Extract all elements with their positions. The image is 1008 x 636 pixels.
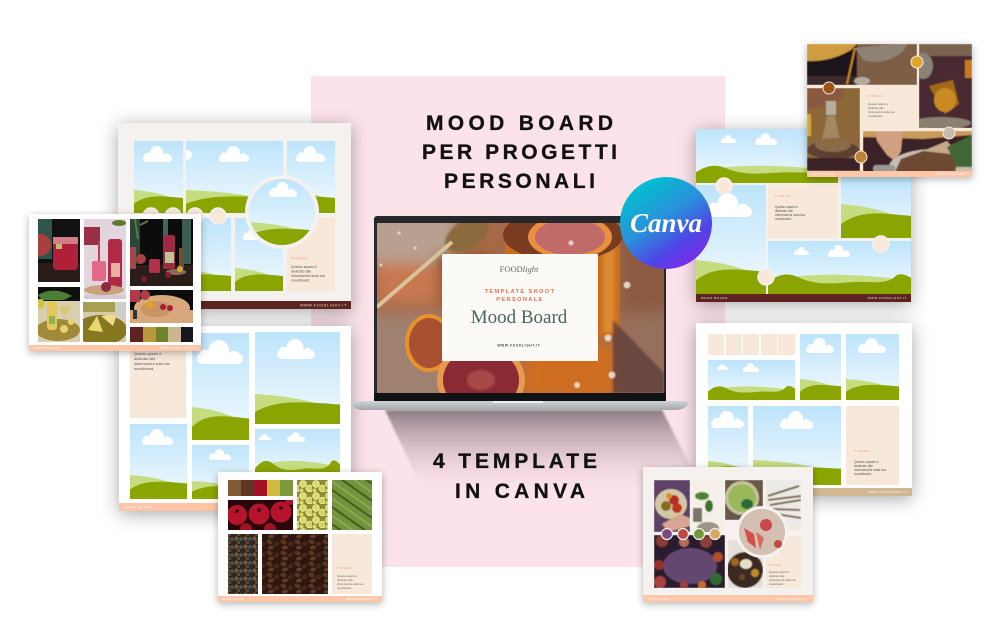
photo: pouring juice: [84, 219, 126, 299]
text block: [846, 406, 899, 485]
title: PER PROGETTI: [422, 141, 617, 164]
text block: TITOLO: [337, 566, 352, 570]
colour swatches: [716, 178, 889, 285]
photo placeholders: [708, 334, 899, 485]
text block: dedicato alle: [291, 270, 311, 274]
text block: Questo spazio è: [337, 574, 358, 578]
trackpad notch: [493, 401, 543, 403]
baking mood board card: [807, 44, 981, 185]
laptop base: [351, 401, 689, 410]
pink background panel: [311, 76, 725, 567]
subtitle: IN CANVA: [455, 480, 585, 503]
text block: informazioni sulla tua: [868, 110, 895, 114]
text block: informazioni sulla tua: [291, 274, 325, 278]
photo: herbs: [692, 491, 720, 532]
photo: tomatoes in bowl: [654, 480, 690, 532]
coffee mood board card: [218, 472, 382, 602]
text block: moodboard.: [134, 367, 154, 371]
photo: coffee beans: [262, 534, 328, 594]
text block: moodboard.: [769, 582, 784, 586]
footer bar: MOOD BOARD: [34, 346, 58, 350]
text block: dedicato alle: [868, 106, 884, 110]
screen title card: WWW.FOODLIGHT.IT: [497, 344, 541, 348]
text block: dedicato alle: [337, 578, 353, 582]
screen photo: [377, 223, 664, 393]
text block: dedicato alle: [134, 357, 155, 361]
footer bar: [118, 301, 351, 309]
text block: Questo spazio è: [291, 265, 317, 269]
text block: informazioni sulla tua: [337, 582, 364, 586]
footer bar: WWW.FOODLIGHT.IT: [346, 597, 378, 601]
footer bar: WWW.FOODLIGHT.IT: [300, 304, 347, 308]
footer bar: WWW.FOODLIGHT.IT: [936, 172, 968, 176]
text block: TITOLO: [868, 94, 882, 98]
text block: informazioni sulla tua: [769, 578, 796, 582]
template board: lower right: [696, 323, 912, 496]
text block: [130, 330, 186, 418]
Canva logo badge: Canva: [630, 208, 702, 238]
photo: lemon wedges: [83, 302, 126, 342]
footer bar: MOOD BOARD: [812, 172, 834, 176]
footer bar: [29, 345, 201, 351]
photo: green soup: [725, 480, 763, 520]
title: MOOD BOARD: [426, 112, 613, 135]
screen title card: TEMPLATE SHOOT: [485, 289, 555, 295]
colour swatches: [662, 528, 720, 540]
colour palette: [130, 327, 193, 342]
photo: yellow drink: [38, 287, 80, 342]
subtitle: 4 TEMPLATE: [433, 450, 597, 473]
template board: upper right: [696, 129, 911, 302]
text block: TITOLO: [854, 449, 870, 453]
colour palette: [228, 480, 293, 496]
photo placeholders: [696, 129, 911, 294]
photo: lemon slices: [297, 480, 328, 530]
photo: raspberries: [228, 500, 293, 530]
text block: Questo spazio è: [868, 102, 889, 106]
photo: breadsticks: [766, 481, 801, 529]
text block: Questo spazio è: [134, 352, 161, 356]
palette squares: [708, 334, 795, 355]
photo placeholders: [130, 332, 340, 499]
text block: informazioni sulla tua: [775, 213, 805, 217]
screen title card: Mood Board: [471, 307, 568, 328]
colour swatches: [143, 208, 226, 224]
circular photo: [736, 506, 788, 558]
text block: moodboard.: [854, 472, 872, 476]
footer bar: [696, 488, 912, 496]
photo placeholders: [134, 141, 335, 291]
text block: Questo spazio è: [775, 205, 798, 209]
text block: moodboard.: [868, 114, 883, 118]
footer bar: [696, 294, 911, 302]
colour swatches: [823, 56, 955, 163]
pomegranate mood board card: [29, 214, 201, 351]
fruit mood board card: [643, 467, 813, 602]
text block: dedicato alle: [854, 464, 873, 468]
screen title card: [442, 254, 598, 361]
screen title card: FOODlight: [500, 264, 539, 274]
footer bar: WWW.FOODLIGHT.IT: [869, 490, 908, 494]
footer bar: [643, 595, 813, 602]
text block: moodboard.: [291, 278, 310, 282]
text block: informazioni sulla tua: [854, 468, 886, 472]
photo: amber glass: [919, 44, 972, 128]
Canva logo badge: [620, 177, 712, 269]
photo: blueberries: [228, 534, 258, 594]
text block: moodboard.: [775, 217, 792, 221]
footer bar: MOOD BOARD: [648, 597, 670, 601]
footer bar: [218, 596, 382, 602]
photo: sifting sugar: [807, 88, 860, 171]
template board: lower left: [119, 326, 351, 511]
text block: Questo spazio è: [769, 570, 790, 574]
photo: green leaf: [332, 480, 372, 530]
photo: wooden plate: [130, 290, 193, 323]
footer bar: WWW.FOODLIGHT.IT: [777, 597, 809, 601]
laptop shadow: [385, 410, 705, 495]
text block: [868, 94, 895, 118]
text block: [766, 536, 801, 588]
text block: [332, 534, 372, 594]
subtitle: [433, 450, 597, 503]
footer bar: MOOD BOARD: [701, 296, 728, 300]
footer bar: WWW.FOODLIGHT.IT: [160, 346, 196, 350]
text block: [287, 218, 335, 291]
text block: Questo spazio è: [854, 460, 879, 464]
photo: pomegranate drink: [38, 219, 80, 282]
footer bar: MOOD BOARD: [222, 597, 244, 601]
photo: berries and peaches: [654, 535, 725, 588]
photo: teapot pouring: [807, 44, 917, 85]
template board: top left: [118, 123, 351, 309]
text block: TITOLO: [769, 563, 782, 567]
text block: moodboard.: [337, 586, 352, 590]
photo: cheese board: [728, 540, 763, 588]
photo: sliced cake: [863, 131, 972, 171]
screen title card: PERSONALE: [496, 297, 544, 303]
footer bar: [119, 503, 351, 511]
footer bar: [807, 171, 972, 177]
laptop: [351, 209, 689, 418]
circular photo: [245, 175, 319, 249]
screen bezel bottom: [374, 393, 666, 402]
title: [422, 112, 617, 193]
footer bar: WWW.FOODLIGHT.IT: [868, 296, 907, 300]
text block: TITOLO: [775, 194, 791, 198]
text block: dedicato alle: [769, 574, 785, 578]
photo: bottle on table: [130, 219, 193, 286]
text block: dedicato alle: [775, 209, 793, 213]
text block: informazioni sulla tua: [134, 362, 171, 366]
laptop frame: [374, 216, 666, 402]
text block: [768, 185, 838, 238]
footer bar: MOOD BOARD: [124, 506, 152, 510]
text block: TITOLO: [291, 256, 308, 260]
title: PERSONALI: [444, 170, 595, 193]
